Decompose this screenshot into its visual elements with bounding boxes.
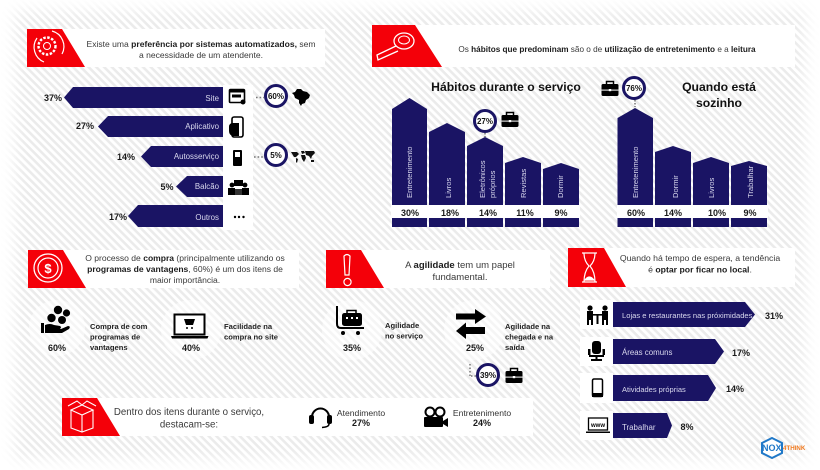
bar: Trabalhar 9%: Trabalhar bbox=[746, 165, 755, 198]
bar: Eletrônicos próprios 14%: Eletrônicos bbox=[478, 160, 487, 198]
bar: Lojas e restaurantes bbox=[613, 302, 783, 327]
bar: Revistas 11%: Revistas bbox=[519, 169, 528, 198]
item: agilidade na chegada e na saída bbox=[444, 300, 554, 386]
logo: NOX4THINK: 4THINK bbox=[783, 445, 806, 452]
icon: opposite arrows bbox=[456, 309, 486, 339]
bar: Eletrônicos próprios 14%: próprios bbox=[488, 170, 497, 198]
callout: 39%: 39% bbox=[480, 371, 496, 380]
item: compra com programas de vantagens: Compra de com bbox=[90, 322, 148, 331]
callout: 5% mundo bbox=[254, 144, 315, 166]
heading: quando está sozinho: Quando está bbox=[682, 80, 756, 94]
bar: Eletrônicos próprios 14%: 14% bbox=[479, 208, 497, 218]
item: agilidade no serviço: 35% bbox=[343, 343, 361, 353]
bar: Livros 10%: Livros bbox=[707, 178, 716, 198]
icon: briefcase bbox=[502, 112, 518, 127]
item: agilidade no serviço: no serviço bbox=[385, 332, 423, 340]
panel: agilidade header bbox=[326, 250, 550, 288]
icon: balcão people bbox=[228, 180, 249, 195]
bar: Áreas comuns bbox=[613, 339, 750, 364]
stat: atendimento: 27% bbox=[352, 418, 370, 428]
callout: 60% Brasil: 60% bbox=[268, 92, 284, 101]
icon: Brazil map bbox=[292, 89, 310, 106]
icon: kiosk bbox=[233, 150, 242, 166]
callout: 60% Brasil bbox=[256, 86, 310, 106]
stat: atendimento: Atendimento bbox=[337, 408, 385, 418]
header text: A agilidade tem um papel bbox=[405, 260, 515, 271]
bar: Dormir 14%: Dormir bbox=[671, 175, 680, 198]
item: agilidade no serviço: Agilidade bbox=[385, 321, 419, 330]
bar: Livros 18%: Livros bbox=[444, 178, 453, 198]
bar: Autosserviço: Autosserviço bbox=[174, 152, 220, 161]
bar: Trabalhar: 8% bbox=[680, 422, 694, 432]
bar: Balcão: 5% bbox=[160, 182, 174, 192]
bar: Entretenimento 60%: 60% bbox=[627, 208, 645, 218]
icon: laptop with cart bbox=[171, 314, 208, 338]
icon: smartphone bbox=[592, 379, 603, 397]
bar: Dormir 9% bbox=[543, 163, 579, 227]
icon: www laptop: www bbox=[590, 423, 605, 429]
bar: Lojas e restaurantes: 31% bbox=[765, 311, 783, 321]
bar: Livros 18% bbox=[429, 123, 465, 227]
header text: a necessidade de um atendente. bbox=[139, 50, 263, 60]
item: facilidade na compra no site: compra no site bbox=[224, 332, 278, 342]
header text: O processo de compra (principalmente utilizando os bbox=[85, 253, 285, 263]
header text: Dentro dos itens durante o serviço, bbox=[114, 407, 264, 418]
bar: Entretenimento 30%: Entretenimento bbox=[405, 146, 414, 198]
bar: Revistas 11%: 11% bbox=[516, 208, 534, 218]
icon: website bbox=[230, 90, 246, 104]
icon: hourglass bbox=[582, 253, 597, 282]
bar: Aplicativo bbox=[76, 116, 223, 137]
bar: Revistas 11% bbox=[505, 157, 541, 227]
chart: quando está sozinho bbox=[602, 78, 768, 227]
header text: é optar por ficar no local. bbox=[648, 264, 752, 274]
item: facilidade na compra no site: 40% bbox=[182, 343, 200, 353]
callout: 27%: 27% bbox=[477, 117, 493, 126]
heading: quando está sozinho: sozinho bbox=[696, 96, 742, 110]
header text: Os hábitos que predominam são o de utilização de entretenimento e a leitura bbox=[458, 45, 756, 54]
icon: magnifying glass bbox=[377, 33, 414, 60]
bar: Entretenimento 60%: Entretenimento bbox=[631, 146, 640, 198]
bar: Atividades próprias bbox=[613, 375, 744, 401]
bar: Outros: Outros bbox=[195, 213, 219, 222]
panel: compra header bbox=[28, 250, 299, 288]
item: agilidade na chegada e na saída: chegada e na bbox=[505, 332, 554, 342]
chart: tempo de espera bbox=[580, 300, 783, 440]
header text: maior importância. bbox=[150, 275, 220, 285]
icon: open box bbox=[68, 401, 96, 432]
bar: Balcão: Balcão bbox=[195, 182, 220, 191]
header text: Existe uma preferência por sistemas automatizados, sem bbox=[87, 39, 315, 49]
icon: chair bbox=[588, 341, 605, 361]
bar: Site bbox=[44, 87, 223, 108]
bar: Aplicativo: Aplicativo bbox=[185, 122, 220, 131]
item: agilidade na chegada e na saída: saída bbox=[505, 343, 525, 352]
item: agilidade na chegada e na saída: Agilidade na bbox=[505, 322, 551, 331]
header text: Quando há tempo de espera, a tendência bbox=[620, 253, 780, 263]
item: facilidade na compra no site: Facilidade na bbox=[224, 322, 273, 331]
callout: 76% bbox=[624, 78, 644, 107]
stat: atendimento bbox=[337, 408, 385, 428]
icon: briefcase bbox=[602, 82, 618, 96]
icon: gear with arrows bbox=[34, 31, 64, 62]
bar: Site: 37% bbox=[44, 93, 62, 103]
bar: Áreas comuns: 17% bbox=[732, 348, 750, 358]
stat: entretenimento bbox=[453, 408, 511, 428]
icon: film camera bbox=[424, 408, 448, 427]
bar: Dormir 14%: 14% bbox=[664, 208, 682, 218]
bar: Trabalhar: Trabalhar bbox=[622, 423, 656, 432]
item: facilidade na compra no site bbox=[161, 300, 278, 360]
bar: Dormir 9%: 9% bbox=[554, 208, 568, 218]
bar: Autosserviço: 14% bbox=[117, 152, 135, 162]
panel: tempo de espera header bbox=[568, 248, 795, 287]
logo: NOX4THINK bbox=[762, 438, 806, 458]
item: compra com programas de vantagens: programas de bbox=[90, 332, 140, 342]
icon: coin: $ bbox=[44, 261, 52, 276]
bar: Lojas e restaurantes: Lojas e restaurantes nas próximidades bbox=[622, 311, 753, 320]
stat: entretenimento: Entretenimento bbox=[453, 408, 511, 418]
chart: hábitos durante o serviço bbox=[391, 98, 580, 227]
bar: Eletrônicos próprios 14% bbox=[467, 137, 503, 227]
item: agilidade na chegada e na saída: 25% bbox=[466, 343, 484, 353]
icon: ellipsis bbox=[234, 216, 245, 218]
chart: preferência por canal bbox=[44, 85, 315, 230]
icon: world map bbox=[291, 151, 315, 163]
item: compra com programas de vantagens: 60% bbox=[48, 343, 66, 353]
bar: Site: Site bbox=[205, 94, 220, 103]
header text: destacam-se: bbox=[160, 420, 218, 430]
bar: Trabalhar bbox=[613, 413, 694, 438]
icon: exclamation mark bbox=[344, 254, 351, 286]
stat: entretenimento: 24% bbox=[473, 418, 491, 428]
icon: hand with coins bbox=[41, 306, 70, 333]
item: agilidade no serviço bbox=[322, 300, 423, 360]
bar: Áreas comuns: Áreas comuns bbox=[622, 348, 672, 357]
callout: 76%: 76% bbox=[626, 84, 642, 93]
item: compra com programas de vantagens bbox=[29, 300, 148, 356]
icon: www laptop bbox=[586, 418, 610, 433]
header text: fundamental. bbox=[433, 272, 487, 283]
logo: NOX4THINK: NOX bbox=[762, 443, 782, 453]
header text: programas de vantagens, 60%) é um dos itens de bbox=[87, 264, 283, 274]
bar: Dormir 14% bbox=[655, 146, 691, 227]
bar: Atividades próprias: Atividades próprias bbox=[622, 385, 686, 394]
bar: Aplicativo: 27% bbox=[76, 121, 94, 131]
bar: Livros 10% bbox=[693, 157, 729, 227]
bar: Livros 10%: 10% bbox=[708, 208, 726, 218]
bar: Livros 18%: 18% bbox=[441, 208, 459, 218]
callout: 27% bbox=[474, 110, 496, 137]
bar: Outros: 17% bbox=[109, 212, 127, 222]
icon: briefcase bbox=[506, 368, 522, 383]
bar: Autosserviço bbox=[117, 146, 223, 167]
icon: luggage cart bbox=[337, 306, 364, 335]
bar: Entretenimento 30%: 30% bbox=[401, 208, 419, 218]
panel: sistemas automatizados header bbox=[27, 29, 325, 67]
bar: Trabalhar 9% bbox=[731, 161, 767, 227]
bar: Atividades próprias: 14% bbox=[726, 384, 744, 394]
icon: coin bbox=[34, 254, 62, 282]
bar: Dormir 9%: Dormir bbox=[556, 175, 565, 198]
icon: headset bbox=[309, 408, 332, 428]
bar: Trabalhar 9%: 9% bbox=[743, 208, 757, 218]
bar: Balcão bbox=[160, 176, 223, 197]
heading: hábitos durante o serviço: Hábitos durante o serviço bbox=[431, 80, 581, 94]
icon: phone in hand bbox=[229, 117, 243, 137]
bar: Entretenimento 60% bbox=[618, 108, 653, 227]
icon: people at table bbox=[587, 305, 608, 325]
bar: Entretenimento 30% bbox=[392, 98, 427, 227]
callout: 5% mundo: 5% bbox=[270, 151, 282, 160]
item: compra com programas de vantagens: vantagens bbox=[90, 343, 128, 352]
panel: itens durante o serviço bbox=[62, 398, 533, 436]
bar: Outros bbox=[109, 205, 223, 227]
panel: hábitos header bbox=[372, 25, 795, 67]
